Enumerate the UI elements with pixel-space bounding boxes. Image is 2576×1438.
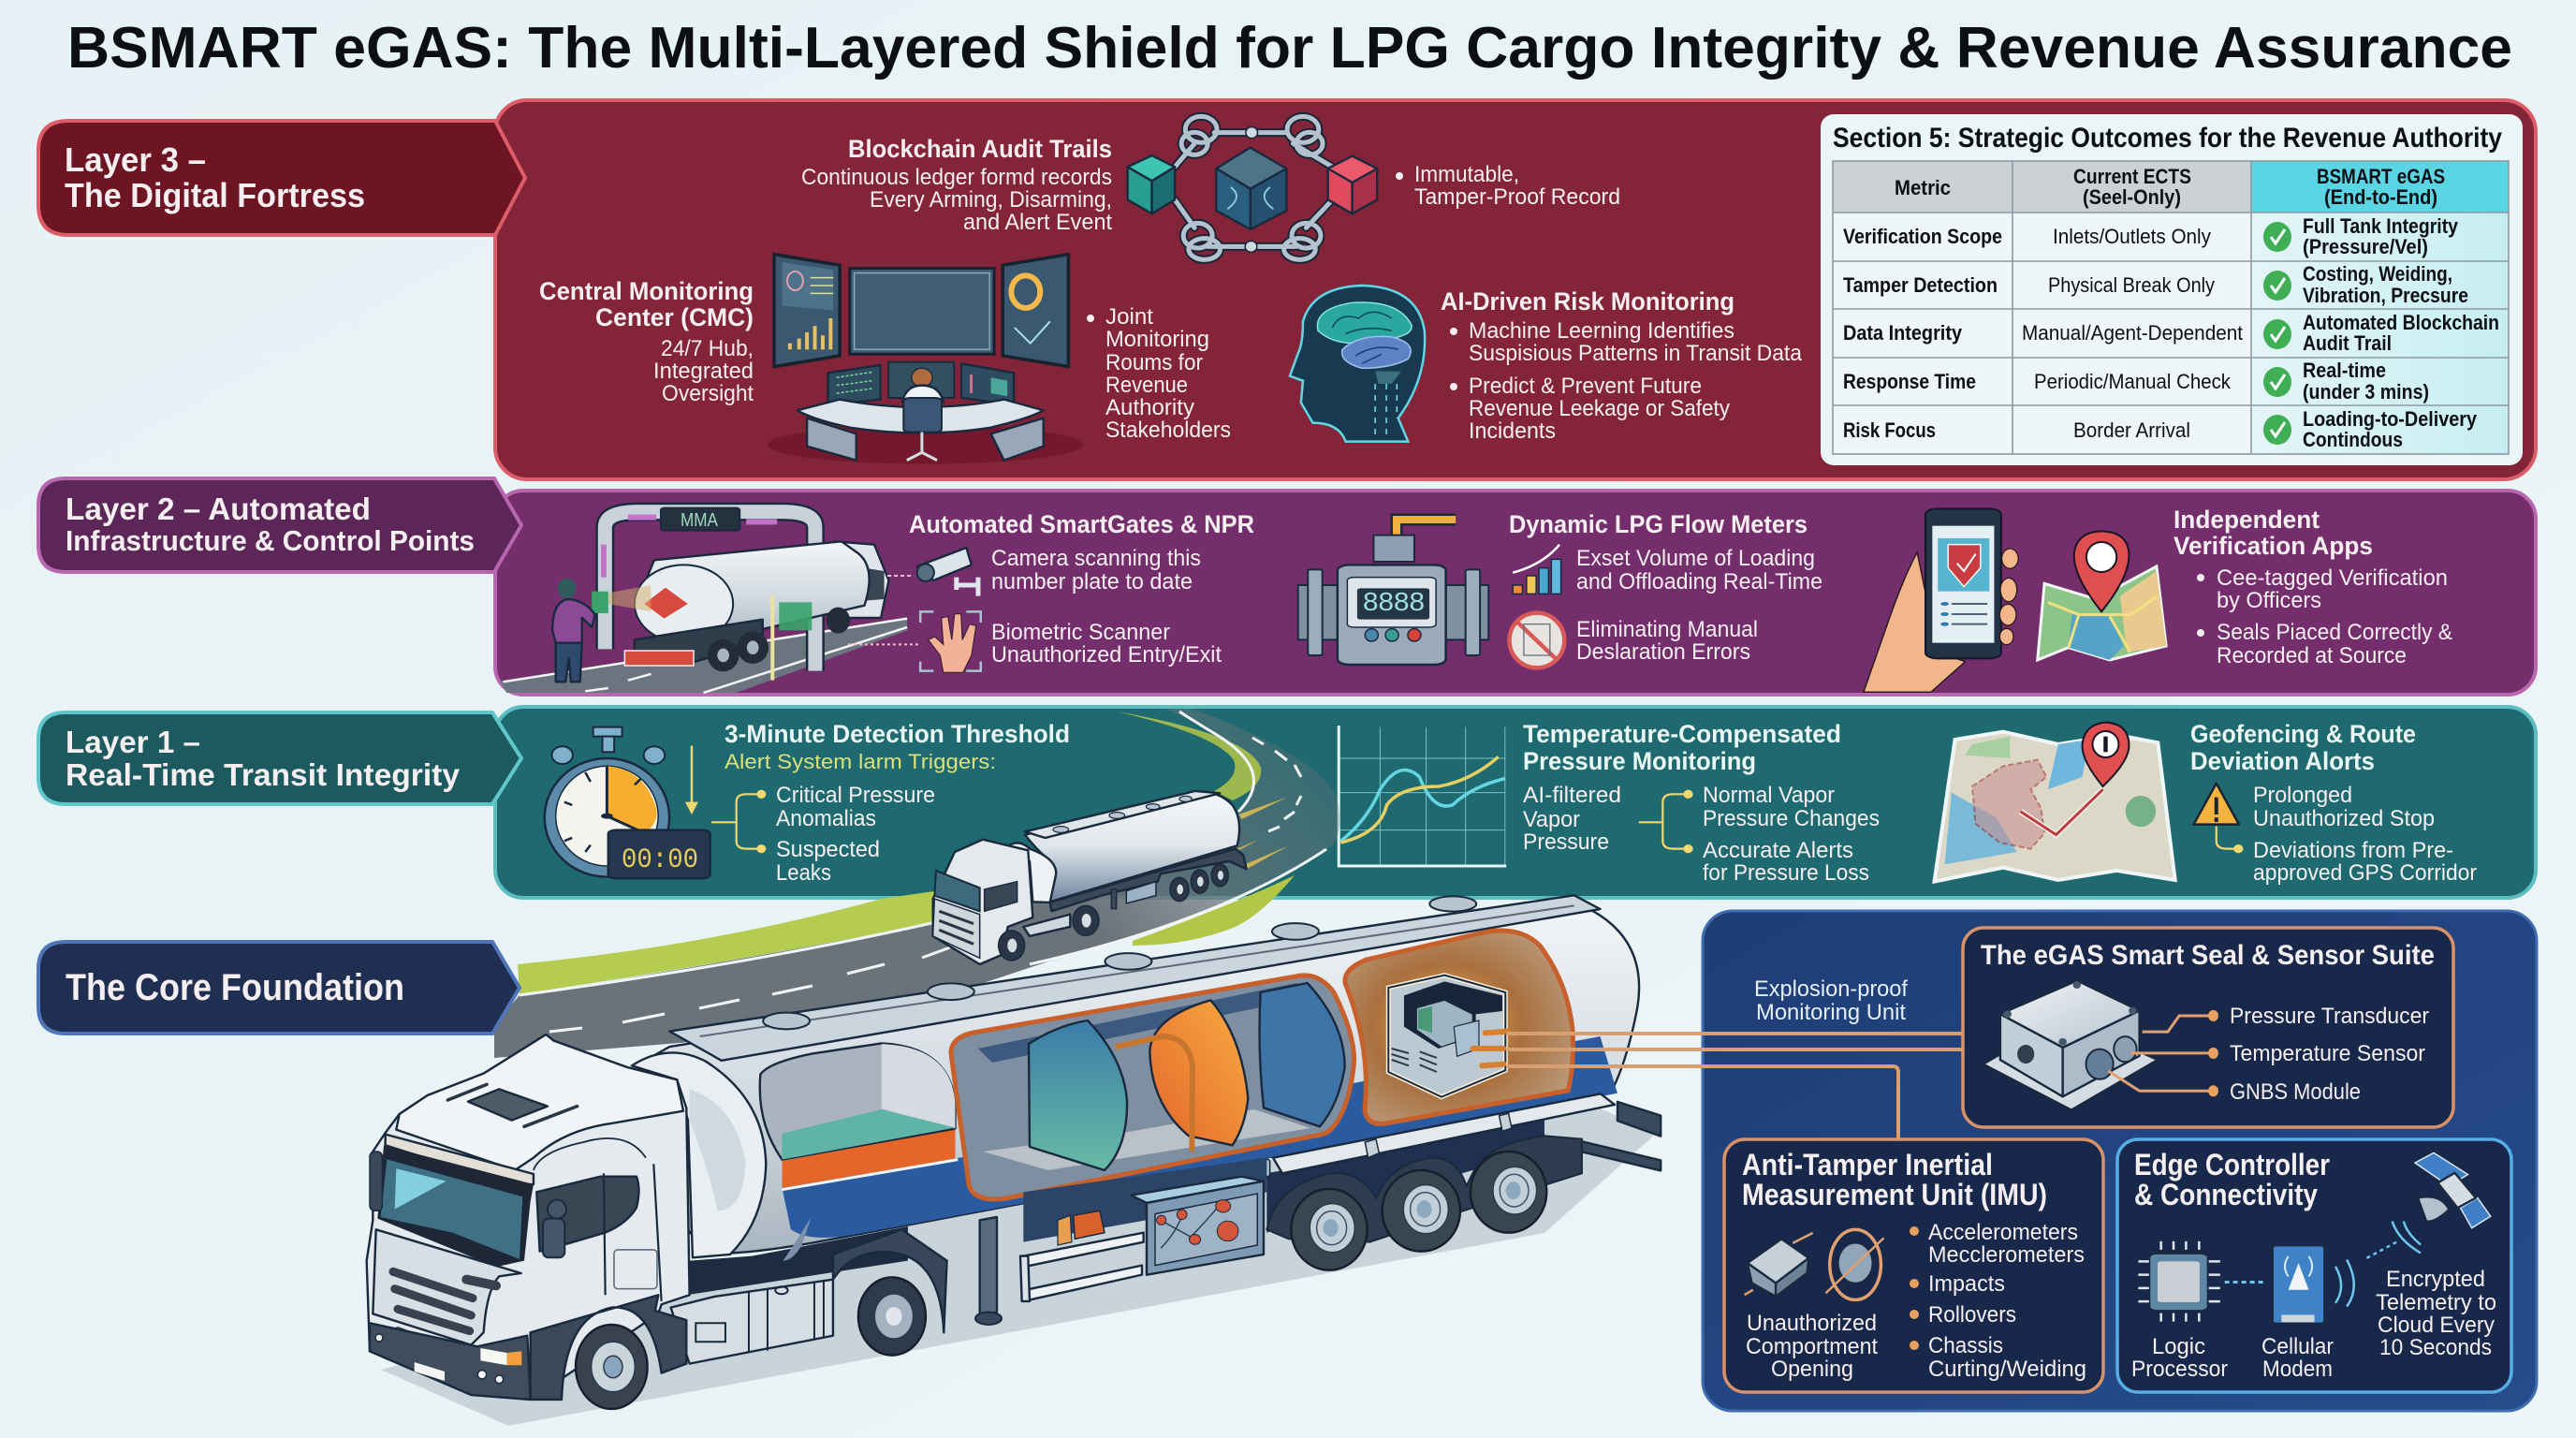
temperature compensated text: Vapor: [1523, 807, 1580, 832]
icon: IMU module and gyroscope: [1745, 1229, 1883, 1299]
detection threshold text: [724, 720, 1070, 886]
IMU detection list: Accelerometers: [1928, 1220, 2078, 1245]
icon: map with location pin: [2038, 531, 2166, 660]
detection threshold text: Anomalias: [776, 806, 876, 831]
IMU detection list: Chassis: [1928, 1333, 2003, 1358]
flow meters heading: Dynamic LPG Flow Meters: [1509, 510, 1808, 538]
IMU caption: Comportment: [1746, 1334, 1878, 1359]
table header row: Metric: [1895, 176, 1951, 199]
row: verification scope: Full Tank Integrity: [2303, 214, 2459, 238]
table title: Section 5: Strategic Outcomes for the Revenue Authority: [1833, 123, 2502, 154]
icon: blockchain cubes and chain: [1128, 116, 1377, 259]
icon: warning triangle with arrow: [2194, 784, 2243, 853]
geofencing text: Deviations from Pre-: [2253, 838, 2453, 863]
illustration: main LPG tanker cutaway: [367, 895, 1661, 1426]
geofencing text: approved GPS Corridor: [2253, 860, 2477, 886]
independent verification apps text: Seals Piaced Correctly &: [2217, 620, 2452, 645]
IMU caption: Opening: [1771, 1357, 1853, 1382]
row: risk focus: Risk Focus: [1843, 418, 1936, 442]
illustration: small tanker on road: [933, 791, 1289, 964]
sensor list: [2230, 1004, 2429, 1105]
compartment: monitoring unit cutaway: [1345, 931, 1573, 1123]
flow meter text 1: Exset Volume of Loading: [1576, 546, 1815, 571]
table header row: (End-to-End): [2324, 185, 2437, 209]
row: response time: [1843, 359, 2429, 404]
independent verification apps text: Verification Apps: [2174, 532, 2373, 560]
tank shell: [638, 902, 1639, 1254]
explosion-proof unit label: Monitoring Unit: [1756, 1000, 1906, 1025]
independent verification apps text: [2174, 506, 2452, 668]
box: smart seal and sensor suite: [1963, 928, 2453, 1127]
explosion-proof unit label: Explosion-proof: [1754, 976, 1908, 1002]
icons: processor, modem, satellite: [2138, 1152, 2491, 1323]
icon: LPG flow meter: [1298, 520, 1488, 665]
icon: AI brain in head profile: [1290, 286, 1425, 442]
row: tamper detection: [1843, 262, 2468, 307]
geofencing text: [2190, 720, 2477, 886]
central monitoring center text: Central Monitoring: [539, 277, 754, 305]
IMU detection list: [1910, 1220, 2086, 1382]
camera text: [991, 546, 1201, 594]
connector lines: tank unit to sensor boxes: [1507, 1034, 1963, 1139]
row: data integrity: Manual/Agent-Dependent: [2022, 321, 2243, 345]
row: tamper detection: Vibration, Precsure: [2303, 284, 2468, 307]
tractor fuel tank, frame and rear wheel: [671, 1217, 947, 1364]
tab: core foundation: [38, 942, 520, 1034]
icon: pressure line chart: [1339, 726, 1506, 866]
flow meter text 2: Eliminating Manual: [1576, 617, 1758, 642]
smart gates heading: Automated SmartGates & NPR: [909, 510, 1254, 538]
row: verification scope: (Pressure/Vel): [2303, 235, 2428, 258]
row: risk focus: Border Arrival: [2073, 418, 2190, 442]
icon: control room monitors and operator: [768, 255, 1083, 464]
icon: rising bar chart: [1513, 545, 1561, 594]
bullet: joint monitoring rooms: [1087, 304, 1231, 443]
bullet: joint monitoring rooms: Joint: [1105, 304, 1153, 330]
central monitoring center text: Center (CMC): [595, 303, 754, 331]
detection threshold text: Suspected: [776, 837, 880, 862]
panel: layer 1 real-time transit: [495, 707, 2536, 898]
sensor list: Temperature Sensor: [2230, 1041, 2425, 1066]
panel: layer 3 digital fortress: [495, 100, 2536, 479]
panel: layer 2 automated infrastructure: [495, 491, 2536, 695]
bullet: immutable record: Immutable,: [1414, 162, 1519, 187]
AI-driven risk monitoring text: Suspisious Patterns in Transit Data: [1469, 341, 1803, 366]
blockchain audit trails text: Every Arming, Disarming,: [870, 187, 1112, 213]
icon: route map with geofence and pin: [1935, 723, 2175, 882]
table header row: [1895, 165, 2445, 209]
rear bumper and rails: [1574, 1102, 1661, 1170]
IMU detection list: Mecclerometers: [1928, 1242, 2085, 1268]
detection threshold text: Leaks: [776, 860, 831, 886]
box: edge controller and connectivity: [2117, 1139, 2511, 1392]
flow meter text 1: [1576, 546, 1822, 594]
row: tamper detection: Tamper Detection: [1843, 273, 1998, 297]
temperature compensated text: Accurate Alerts: [1703, 838, 1853, 863]
blockchain audit trails text: Blockchain Audit Trails: [848, 135, 1112, 163]
row: data integrity: Audit Trail: [2303, 331, 2392, 355]
sensor list: Pressure Transducer: [2230, 1004, 2429, 1029]
sensor list: GNBS Module: [2230, 1079, 2361, 1105]
detection threshold text: Alert System larm Triggers:: [724, 750, 996, 773]
title: BSMART eGAS: The Multi-Layered Shield for LPG Cargo Integrity & Revenue Assurance: [67, 16, 2512, 81]
temperature compensated text: for Pressure Loss: [1703, 860, 1869, 886]
temperature compensated text: Normal Vapor: [1703, 783, 1835, 808]
icon: biometric hand scanner: [848, 611, 981, 672]
timer digits: 00:00: [622, 844, 698, 876]
road curving into the distance: [494, 709, 1339, 1058]
edge captions: [2131, 1267, 2496, 1382]
IMU detection list: Curting/Weiding: [1928, 1357, 2086, 1382]
central monitoring center text: [539, 277, 754, 406]
edge captions: Logic: [2152, 1334, 2205, 1359]
row: risk focus: [1843, 407, 2478, 451]
tractor cab: [367, 1034, 690, 1409]
geofencing text: Geofencing & Route: [2190, 720, 2416, 748]
biometric text: Biometric Scanner: [991, 620, 1170, 645]
IMU detection list: Impacts: [1928, 1271, 2005, 1297]
bullet: immutable record: [1396, 162, 1620, 210]
flow meter text 1: and Offloading Real-Time: [1576, 569, 1822, 594]
geofencing text: Unauthorized Stop: [2253, 806, 2435, 831]
row: data integrity: [1843, 311, 2499, 355]
independent verification apps text: by Officers: [2217, 588, 2321, 613]
top rail and valves: [669, 895, 1600, 1061]
IMU detection list: Rollovers: [1928, 1302, 2016, 1328]
panel: strategic outcomes table: [1821, 114, 2523, 465]
temperature compensated text: Temperature-Compensated: [1523, 720, 1841, 748]
biometric text: Unauthorized Entry/Exit: [991, 642, 1222, 668]
row: data integrity: Automated Blockchain: [2303, 311, 2499, 334]
table header row: Current ECTS: [2073, 165, 2191, 188]
bullet: joint monitoring rooms: Roums for: [1105, 350, 1203, 375]
tab: layer 2: [38, 478, 521, 572]
panel: core foundation hardware: [1703, 911, 2537, 1411]
temperature compensated text: [1523, 720, 1880, 886]
box: anti-tamper IMU: [1724, 1139, 2103, 1392]
blockchain audit trails text: [801, 135, 1112, 235]
detection threshold text: 3-Minute Detection Threshold: [724, 720, 1070, 748]
bullet: joint monitoring rooms: Authority: [1105, 395, 1194, 420]
row: tamper detection: Costing, Weiding,: [2303, 262, 2452, 286]
AI-driven risk monitoring text: Machine Leerning Identifies: [1469, 318, 1734, 344]
bullet: joint monitoring rooms: Monitoring: [1105, 327, 1209, 352]
temperature compensated text: Pressure Monitoring: [1523, 747, 1756, 775]
row: response time: Response Time: [1843, 370, 1976, 393]
AI-driven risk monitoring text: Incidents: [1469, 418, 1556, 444]
edge captions: Processor: [2131, 1357, 2228, 1382]
temperature compensated text: AI-filtered: [1523, 783, 1621, 808]
AI-driven risk monitoring text: Predict & Prevent Future: [1469, 374, 1702, 399]
rear wheels: [1266, 1136, 1582, 1270]
tab: layer 2: Infrastructure & Control Points: [66, 524, 475, 557]
edge captions: 10 Seconds: [2379, 1335, 2492, 1360]
tab: layer 2: Layer 2 – Automated: [66, 492, 371, 526]
explosion-proof unit label: [1754, 976, 1908, 1025]
tab: layer 1: [38, 712, 521, 804]
edge captions: Cloud Every: [2378, 1313, 2495, 1338]
tank front dome: [632, 1052, 766, 1257]
gate sign text: MMA: [681, 510, 719, 531]
row: verification scope: Inlets/Outlets Only: [2053, 225, 2211, 248]
bullet: joint monitoring rooms: Stakeholders: [1105, 418, 1231, 443]
flow meter display: 8888: [1363, 587, 1425, 616]
independent verification apps text: Independent: [2174, 506, 2320, 534]
bracket arrows: vapor pressure: [1639, 790, 1693, 853]
IMU caption: [1746, 1311, 1878, 1382]
flow meter text 2: Deslaration Errors: [1576, 639, 1750, 665]
edge captions: Cellular: [2261, 1334, 2334, 1359]
edge captions: Telemetry to: [2376, 1290, 2496, 1315]
compartment: left cutaway: [760, 1043, 955, 1160]
chassis tube and tank underside: [1256, 1093, 1615, 1233]
detection threshold text: Critical Pressure: [776, 783, 935, 808]
icon: stopwatch with digital timer: [545, 727, 766, 878]
icon: hand holding verification phone: [1864, 508, 2018, 692]
box: edge controller and connectivity: & Connectivity: [2134, 1178, 2318, 1211]
box: edge controller and connectivity: Edge Controller: [2134, 1148, 2330, 1181]
row: verification scope: [1843, 214, 2459, 258]
row: verification scope: Verification Scope: [1843, 225, 2002, 248]
AI-driven risk monitoring text: Revenue Leekage or Safety: [1469, 396, 1730, 421]
row: response time: (under 3 mins): [2303, 380, 2429, 404]
tab: layer 3: [38, 121, 525, 235]
tab: core foundation: The Core Foundation: [66, 967, 404, 1008]
toolbox and equipment: [975, 1158, 1266, 1325]
icon: NPR camera: [887, 548, 978, 596]
AI-driven risk monitoring text: AI-Driven Risk Monitoring: [1441, 287, 1734, 315]
tab: layer 3: The Digital Fortress: [65, 176, 365, 214]
geofencing text: Deviation Alorts: [2190, 747, 2375, 775]
flow meter text 2: [1576, 617, 1758, 665]
IMU caption: Unauthorized: [1747, 1311, 1877, 1336]
camera text: Camera scanning this: [991, 546, 1201, 571]
tab: layer 3: Layer 3 –: [65, 140, 206, 179]
independent verification apps text: Recorded at Source: [2217, 643, 2407, 668]
row: risk focus: Contindous: [2303, 428, 2403, 451]
row: response time: Periodic/Manual Check: [2034, 370, 2232, 393]
AI-driven risk monitoring text: [1441, 287, 1803, 444]
box: smart seal and sensor suite: The eGAS Smart Seal & Sensor Suite: [1981, 940, 2435, 971]
camera text: number plate to date: [991, 569, 1193, 594]
edge captions: Modem: [2262, 1357, 2333, 1382]
biometric text: [991, 620, 1222, 668]
blockchain audit trails text: and Alert Event: [963, 210, 1112, 235]
row: risk focus: Loading-to-Delivery: [2303, 407, 2478, 431]
row: tamper detection: Physical Break Only: [2048, 273, 2215, 297]
central monitoring center text: 24/7 Hub,: [661, 336, 754, 361]
geofencing text: Prolonged: [2253, 783, 2352, 808]
box: anti-tamper IMU: Anti-Tamper Inertial: [1742, 1148, 1993, 1181]
blockchain audit trails text: Continuous ledger formd records: [801, 165, 1112, 190]
row: data integrity: Data Integrity: [1843, 321, 1963, 345]
central monitoring center text: Oversight: [662, 381, 754, 406]
icon: sealed sensor enclosure: [1983, 980, 2218, 1110]
tab: layer 1: Real-Time Transit Integrity: [66, 757, 461, 792]
tab: layer 1: Layer 1 –: [66, 725, 200, 759]
edge captions: Encrypted: [2386, 1267, 2485, 1292]
comparison table grid: [1833, 161, 2509, 454]
row: response time: Real-time: [2303, 359, 2386, 382]
central monitoring center text: Integrated: [653, 359, 754, 384]
bullet: immutable record: Tamper-Proof Record: [1414, 184, 1620, 210]
independent verification apps text: Cee-tagged Verification: [2217, 565, 2448, 591]
table header row: (Seel-Only): [2083, 185, 2181, 209]
temperature compensated text: Pressure: [1523, 829, 1609, 855]
ground shadow: [381, 1105, 1657, 1426]
temperature compensated text: Pressure Changes: [1703, 806, 1880, 831]
illustration: smart gate with tanker and officer: [500, 508, 907, 693]
icon: no manual declaration: [1509, 613, 1564, 668]
compartment: middle cutaway baffles: [951, 976, 1354, 1199]
table header row: BSMART eGAS: [2317, 165, 2445, 188]
bullet: joint monitoring rooms: Revenue: [1105, 373, 1188, 398]
box: anti-tamper IMU: Measurement Unit (IMU): [1742, 1178, 2047, 1211]
